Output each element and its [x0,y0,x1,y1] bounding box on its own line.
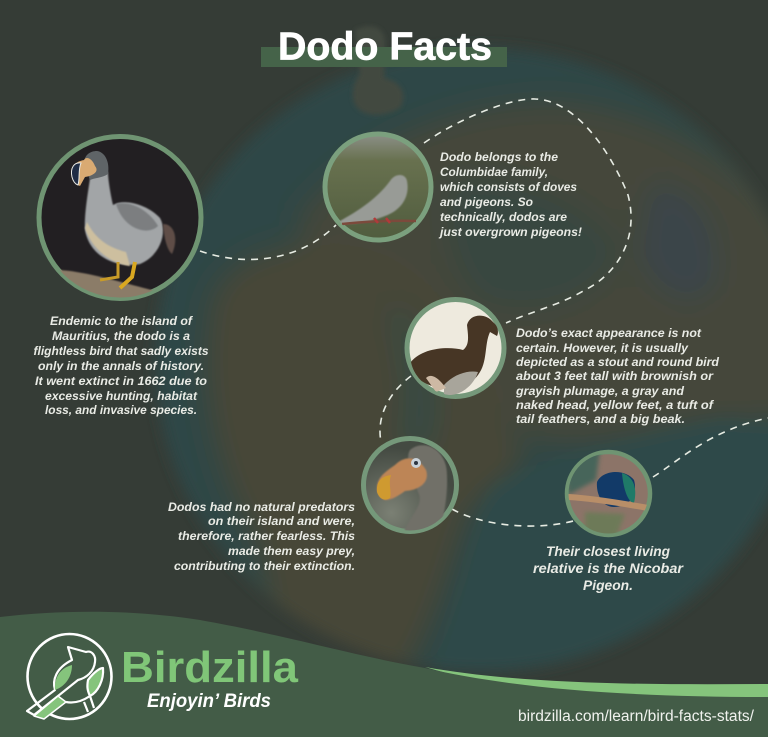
ocean: Indian [496,426,726,494]
title: Dodo Facts [278,26,492,68]
text: no natural predators: contributing to their extinction. [174,559,355,573]
logo tagline: Enjoyin’ Birds [147,691,271,712]
text: Columbidae family: which consists of doves [440,180,577,194]
text: appearance: about 3 feet tall with brownish or [516,369,714,383]
photo: Nicobar pigeon [565,450,650,540]
text: Mauritius intro: excessive hunting, habitat [45,389,198,403]
ocean: central strip [400,332,436,439]
dashed connector: fifth bird to page edge [653,418,768,477]
land: Africa [206,244,522,680]
dashed connector: fourth to fifth bird [452,509,577,526]
footer band [0,612,768,737]
text: Columbidae family: technically, dodos are [440,210,567,224]
photo: dodo model [39,136,201,310]
text: no natural predators: on their island and were, [208,514,355,528]
text: appearance: grayish plumage, a gray and [515,384,685,398]
text: no natural predators [168,500,355,573]
text: Mauritius intro: It went extinct in 1662 due to [35,374,207,388]
text: Mauritius intro: Endemic to the island of [50,314,193,328]
text: appearance: certain. However, it is usually [516,341,689,355]
text: Mauritius intro: flightless bird that sadly exists [34,344,209,358]
text: no natural predators: therefore, rather fearless. This [178,529,355,543]
land: Indian subcontinent tint [646,193,714,294]
ocean: north central [454,186,607,300]
text: Mauritius intro: loss, and invasive species. [45,403,197,417]
text: appearance [515,326,720,426]
text: Mauritius intro [34,314,209,417]
text: appearance: depicted as a stout and round bird [516,355,720,369]
text: appearance: naked head, yellow feet, a tuft of [516,398,714,412]
text: closest relative: Their closest living [546,544,671,559]
land: Europe and Asia [300,102,768,444]
source URL: birdzilla.com/learn/bird-facts-stats/ [518,708,755,725]
globe backdrop [140,40,768,680]
text: Columbidae family: Dodo belongs to the [440,150,558,164]
text: no natural predators: made them easy prey, [228,544,355,558]
text: Mauritius intro: only in the annals of history. [38,359,204,373]
text: Columbidae family: and pigeons. So [440,195,533,209]
text: no natural predators: Dodos had no natural predators [168,500,355,514]
text: closest relative [533,544,684,593]
text: Columbidae family: just overgrown pigeons! [438,225,582,239]
dashed connector: second to third bird [424,99,631,323]
globe stand [353,26,403,115]
text: Mauritius intro: Mauritius, the dodo is a [52,329,190,343]
text: Columbidae family: Columbidae family, [440,165,548,179]
text: closest relative: Pigeon. [583,578,633,593]
dashed connector: first to second bird [200,225,336,259]
text: closest relative: relative is the Nicobar [533,561,684,576]
photo: dodo head [364,438,456,534]
text: appearance: tail feathers, and a big beak. [516,412,685,426]
text: appearance: Dodo’s exact appearance is not [516,326,702,340]
text: Columbidae family [438,150,582,239]
photo: pigeon [325,134,431,240]
dashed connector: third to fourth bird [380,376,411,442]
photo: dodo engraving [407,300,504,396]
logo: bird in circle [27,634,112,719]
logo wordmark: Birdzilla [121,643,299,692]
